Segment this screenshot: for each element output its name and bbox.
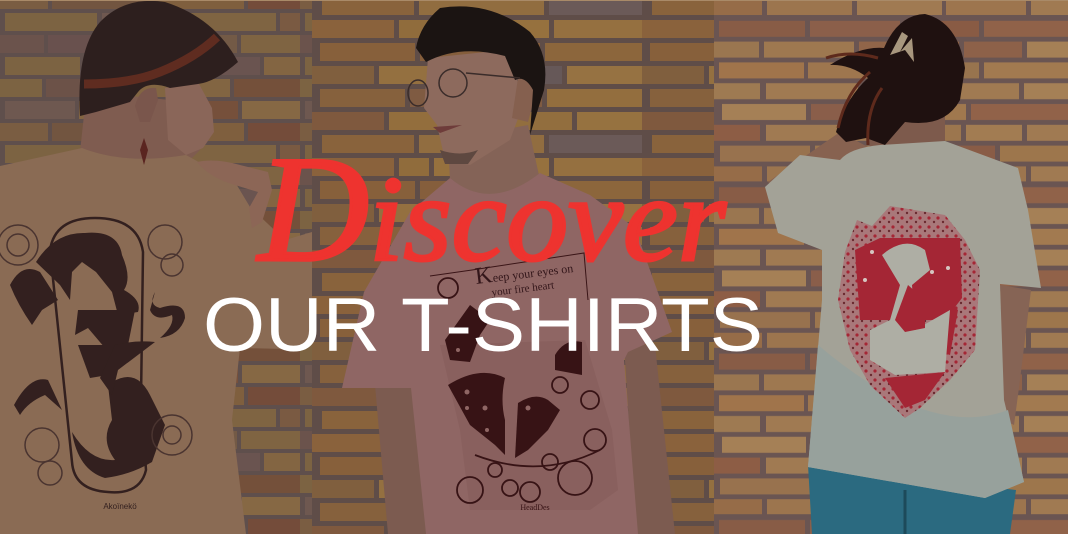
cream t-shirt [765,141,1041,498]
skin: neck and shoulder [80,95,200,160]
dark wings [448,373,505,455]
foliage texture [838,206,980,418]
arch frame [50,218,146,492]
artwork: red heart print [838,206,980,418]
lower hair [72,377,165,478]
central figure [870,244,950,375]
face [165,82,214,155]
heading: Discover: Discover [256,125,727,293]
neck [868,100,945,155]
lips [433,125,462,133]
upper hair [36,233,139,315]
wing stars [456,348,530,432]
top edge highlight [0,0,1068,1]
hair [416,6,545,135]
right red piece [935,300,958,355]
ear [135,88,158,122]
raised arm [768,132,870,200]
print signature: HeadDes [520,503,550,512]
left curl [10,269,58,325]
stars [863,250,950,282]
quote banner line [430,253,588,300]
panel: man in pink t-shirt [342,6,675,534]
side smoke [150,292,185,338]
pink t-shirt [342,173,672,534]
panel: woman in tan t-shirt [0,1,312,534]
artwork: dragon print [430,252,618,512]
glasses [408,69,520,106]
solid red sky [855,238,962,320]
jeans center seam [904,490,906,534]
red ponytail strands [826,54,882,145]
print linework [440,340,618,510]
artist signature: Akoïnekö [103,502,137,511]
heading: OUR T-SHIRTS: OUR T-SHIRTS [203,283,763,368]
print base [838,206,980,418]
lower red piece [885,372,945,408]
beard [440,150,478,164]
artwork: arch print [10,218,185,492]
quote text: Keep your eyes on [474,252,574,290]
face [424,50,525,165]
jeans [808,465,1016,534]
panel: woman in cream t-shirt [765,14,1041,534]
hair clip [890,32,914,62]
hair [830,14,965,145]
head hair [79,1,238,116]
shirt shade [808,345,1024,498]
arms [375,385,428,534]
artwork: dragon print: your fire heart [491,279,555,299]
red cape [895,285,925,332]
braid [84,37,217,84]
hand on shoulder [197,161,272,228]
tan t-shirt [0,148,312,534]
earring [140,138,148,165]
central collar [75,310,135,348]
flower outlines [0,225,192,485]
lower right arm [1000,285,1031,425]
neck [448,125,540,208]
mask [78,345,115,378]
ear [512,78,536,122]
scrolled ornament [438,278,606,503]
